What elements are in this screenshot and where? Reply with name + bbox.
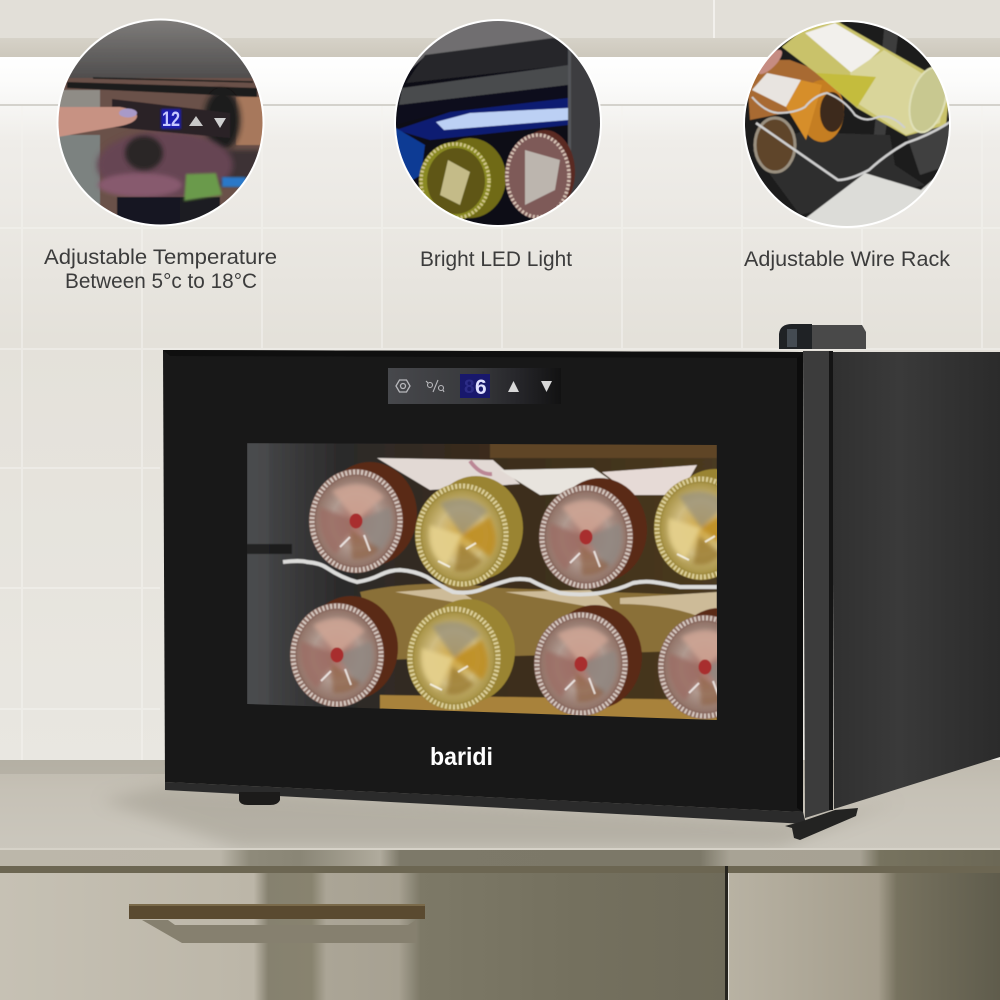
icon: light toggle bbox=[426, 380, 444, 392]
hinge cap bbox=[779, 324, 866, 349]
bottle: top row 2 bbox=[415, 476, 523, 587]
caption: wire rack: Adjustable Wire Rack bbox=[744, 248, 951, 271]
icon: down arrow bbox=[541, 381, 552, 392]
bottle: top row 1 bbox=[309, 462, 417, 573]
lower row necks and labels bbox=[360, 584, 717, 660]
bottle: top row 4 bbox=[653, 468, 717, 581]
bottle: lower row 1 bbox=[290, 596, 398, 707]
bottle: lower row 2 bbox=[407, 599, 515, 710]
bottle: top row 3 bbox=[539, 478, 647, 589]
wire rack bbox=[283, 561, 717, 594]
feature circle: temperature control: 12 bbox=[162, 108, 180, 131]
caption: adjustable temperature bbox=[44, 246, 277, 293]
feature circle: temperature control bbox=[56, 18, 264, 226]
temperature display: 8 bbox=[464, 377, 475, 398]
caption: LED light: Bright LED Light bbox=[420, 248, 572, 271]
fridge foot right bbox=[785, 808, 858, 840]
caption: adjustable temperature: Adjustable Temperature bbox=[44, 246, 277, 269]
fridge foot left bbox=[239, 792, 280, 805]
wine cooler bbox=[163, 324, 1000, 840]
cabinet doors bbox=[0, 866, 1000, 1000]
control panel bbox=[388, 368, 561, 404]
caption: adjustable temperature: Between 5°c to 18°C bbox=[65, 270, 257, 293]
fridge side panel bbox=[832, 352, 1000, 809]
brand logo: baridi bbox=[430, 743, 493, 771]
icon: snowflake bbox=[396, 380, 410, 392]
icon: up arrow bbox=[508, 381, 519, 392]
cabinet handle bbox=[129, 904, 425, 943]
feature circle: LED light bbox=[390, 15, 610, 230]
bottom strip of door bbox=[165, 782, 806, 824]
door edge strip bbox=[803, 351, 831, 818]
background: kitchen wall bbox=[0, 0, 1000, 762]
kitchen counter top bbox=[0, 760, 1000, 866]
feature circle: wire rack bbox=[740, 15, 955, 230]
temperature display: 6 bbox=[475, 376, 487, 399]
glass window with bottles bbox=[247, 443, 717, 720]
bottle: lower row 3 bbox=[534, 605, 642, 716]
bottle: lower row 4 bbox=[657, 608, 717, 720]
temperature display bbox=[460, 374, 490, 399]
door front bbox=[163, 350, 803, 812]
top row labels bbox=[377, 458, 520, 490]
